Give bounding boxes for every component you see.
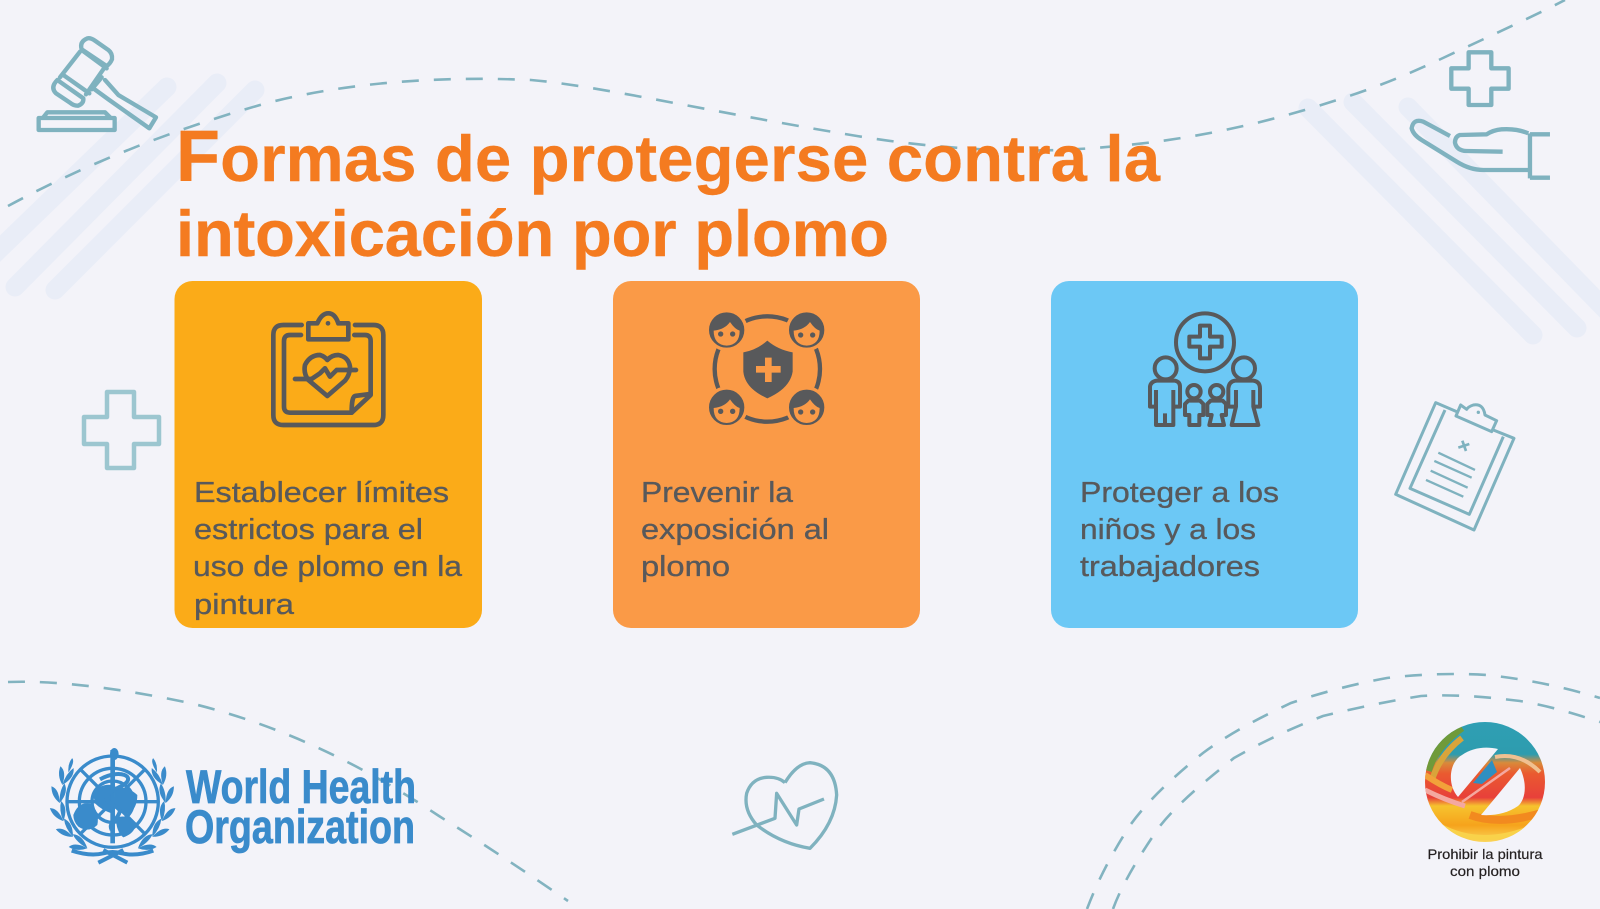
text: organization name [185,760,416,853]
caption: con plomo [1450,863,1520,879]
icon: shield with four faces [707,311,826,427]
text: card 1: uso de plomo en la [193,551,463,583]
text: card 2: Prevenir la [641,477,794,509]
panel: prevenir la exposición [613,281,920,628]
text: card 2: exposición al [641,514,829,546]
panel: proteger a los niños [1051,281,1358,628]
icon: heart with pulse [732,763,837,848]
icon: gavel [39,38,156,130]
caption [1428,846,1543,879]
text: card 1 [193,477,463,621]
text: card 3: Proteger a los [1080,477,1279,509]
title: intoxicación por plomo [176,197,889,270]
icon: tilted clipboard [1396,403,1514,530]
title: Formas de protegerse contra la [176,117,1161,197]
logo: World Health Organization [49,748,416,863]
text: organization name: World Health [186,760,416,813]
icon: clipboard with heart [273,313,383,425]
text: card 3: trabajadores [1080,551,1260,583]
icon: hand holding cross [1412,52,1550,178]
text: card 1: estrictos para el [194,514,423,546]
title [176,117,1161,270]
text: card 2 [641,477,829,583]
caption: Prohibir la pintura [1428,846,1543,862]
icon: paint brush circle [1425,722,1545,842]
text: card 3 [1080,477,1279,583]
logo: ban lead paint [1425,722,1545,879]
text: card 2: plomo [641,551,730,583]
text: card 1: pintura [194,589,295,621]
text: card 3: niños y a los [1080,514,1256,546]
icon: medical cross left [84,392,159,468]
text: organization name: Organization [185,800,415,853]
panel: establecer límites [174,281,482,628]
icon: family with medical cross [1150,313,1260,425]
text: card 1: Establecer límites [194,477,449,509]
icon: WHO emblem [49,748,176,863]
